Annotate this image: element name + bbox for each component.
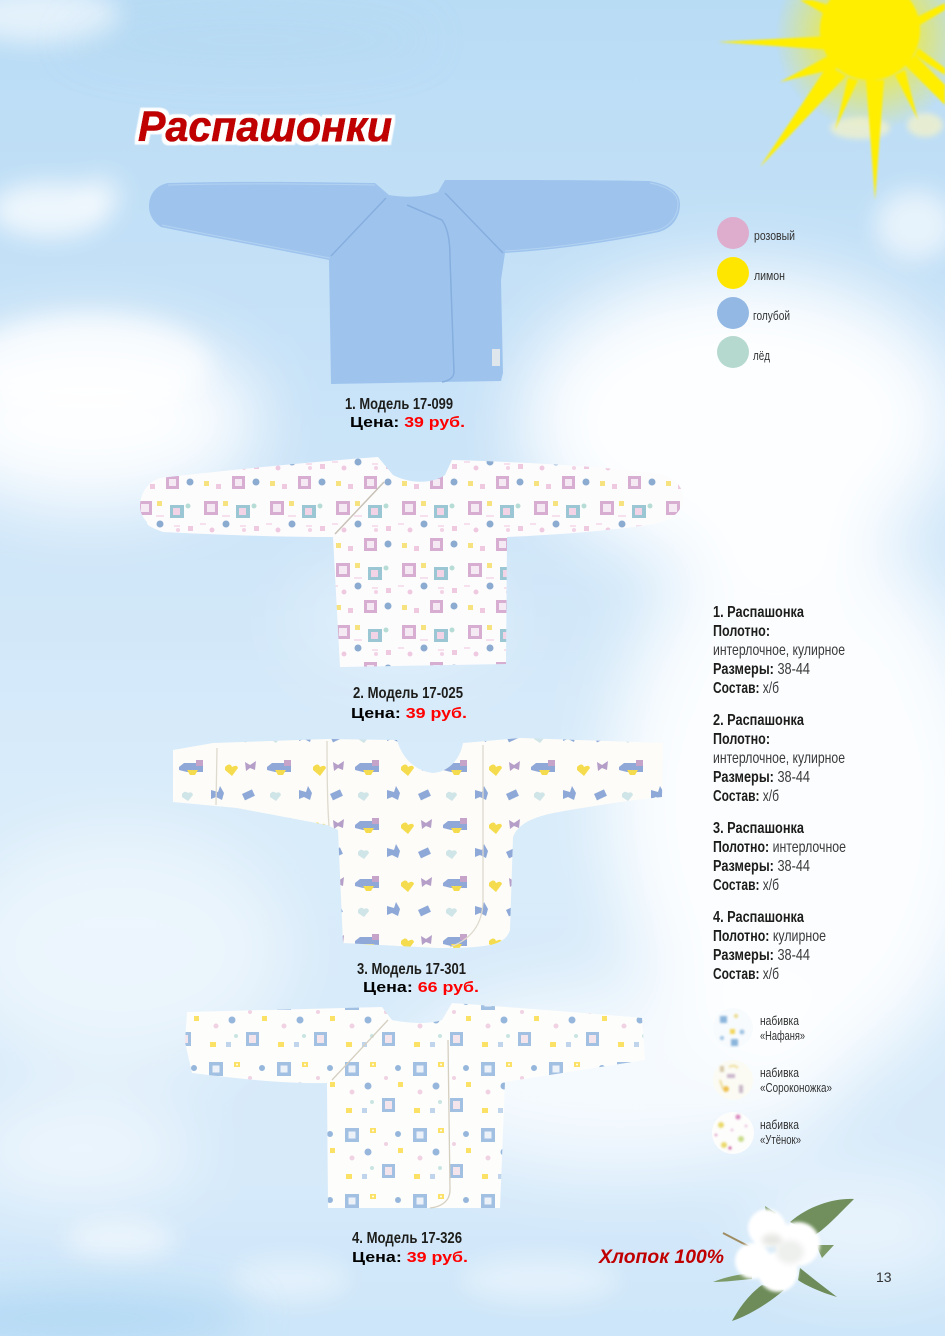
- swatch: blue: [717, 297, 790, 329]
- swatch: ice: лёд: [753, 348, 770, 363]
- swatch: blue: голубой: [753, 308, 790, 323]
- spec 4: 4. Распашонка: [713, 909, 804, 926]
- caption: model 3: 3. Модель 17-301: [357, 961, 466, 978]
- caption: model 2: 2. Модель 17-025: [353, 685, 463, 702]
- spec 2: 2. Распашонка: [713, 712, 804, 729]
- spec 4: [713, 909, 826, 983]
- icon: cotton plant: [713, 1199, 854, 1321]
- garment 1: blue jacket, model 17-099: [149, 180, 680, 384]
- page number: 13: [876, 1269, 892, 1285]
- print: Nafanya: набивка: [760, 1013, 800, 1028]
- caption: model 3: Цена: 66 руб.: [363, 979, 479, 996]
- caption: model 2: [351, 685, 467, 722]
- spec 2: Размеры: 38-44: [713, 769, 810, 786]
- colour legend: [717, 217, 795, 368]
- spec 1: Состав: х/б: [713, 680, 779, 697]
- spec 4: Состав: х/б: [713, 966, 779, 983]
- specification list: [713, 604, 846, 983]
- spec 1: Полотно:: [713, 623, 770, 640]
- spec 1: интерлочное, кулирное: [713, 642, 845, 659]
- spec 1: [713, 604, 845, 697]
- caption: model 4: [352, 1230, 468, 1266]
- caption: model 4: Цена: 39 руб.: [352, 1249, 468, 1266]
- print: Utyonok: набивка: [760, 1117, 800, 1132]
- spec 3: [713, 820, 846, 894]
- title: Распашонки: [138, 103, 392, 151]
- spec 3: Состав: х/б: [713, 877, 779, 894]
- print swatches: [712, 1008, 832, 1154]
- garment 3: patterned jacket, model 17-301: [173, 738, 663, 948]
- spec 2: Полотно:: [713, 731, 770, 748]
- swatch: ice: [717, 336, 770, 368]
- caption: model 4: 4. Модель 17-326: [352, 1230, 462, 1247]
- print: Sorokonozhka: «Сороконожка»: [760, 1080, 832, 1095]
- spec 4: Размеры: 38-44: [713, 947, 810, 964]
- print: Utyonok: «Утёнок»: [760, 1132, 801, 1147]
- spec 3: Размеры: 38-44: [713, 858, 810, 875]
- garment 4: patterned jacket, model 17-326: [185, 1003, 645, 1208]
- print: Sorokonozhka: набивка: [760, 1065, 800, 1080]
- swatch: lemon: [717, 257, 785, 289]
- print: Utyonok: [712, 1112, 801, 1154]
- caption: model 2: Цена: 39 руб.: [351, 705, 467, 722]
- spec 3: Полотно: интерлочное: [713, 839, 846, 856]
- spec 2: [713, 712, 845, 805]
- print: Nafanya: «Нафаня»: [760, 1028, 805, 1043]
- spec 1: 1. Распашонка: [713, 604, 804, 621]
- swatch: lemon: лимон: [754, 268, 785, 283]
- garment 2: patterned jacket, model 17-025: [140, 457, 683, 667]
- print: Sorokonozhka: [713, 1060, 832, 1100]
- label: cotton 100%: Хлопок 100%: [598, 1247, 724, 1268]
- spec 3: 3. Распашонка: [713, 820, 804, 837]
- caption: model 1: Цена: 39 руб.: [350, 414, 465, 431]
- swatch: pink: [717, 217, 795, 249]
- spec 2: Состав: х/б: [713, 788, 779, 805]
- swatch: pink: розовый: [754, 228, 795, 243]
- print: Nafanya: [713, 1008, 805, 1048]
- spec 2: интерлочное, кулирное: [713, 750, 845, 767]
- sun: [718, 0, 945, 200]
- caption: model 1: [345, 396, 465, 431]
- spec 4: Полотно: кулирное: [713, 928, 826, 945]
- spec 1: Размеры: 38-44: [713, 661, 810, 678]
- caption: model 1: 1. Модель 17-099: [345, 396, 453, 413]
- caption: model 3: [357, 961, 479, 996]
